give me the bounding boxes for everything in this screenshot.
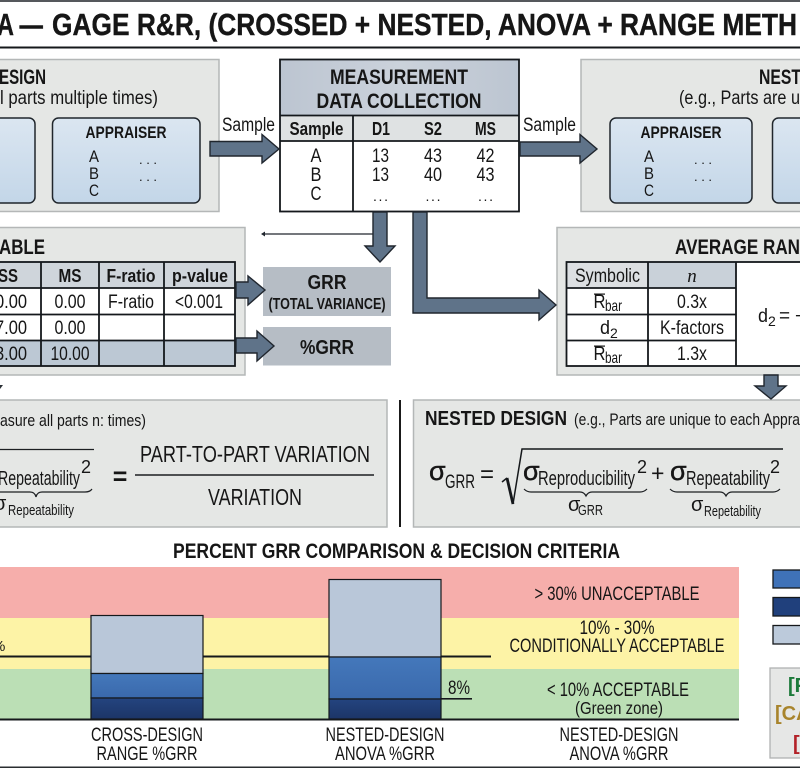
panel: anova table: 10.00	[50, 344, 90, 365]
panel: measurement data collection: A	[310, 146, 322, 167]
panel: measurement data collection: S2	[424, 119, 442, 139]
appraiser box right: ...	[694, 152, 712, 167]
panel: measurement data collection: ...	[478, 188, 493, 204]
panel: nested design formula: GRR	[578, 502, 603, 519]
appraiser box left	[52, 118, 200, 203]
panel: average range table: bar	[605, 350, 622, 367]
axis labels: CROSS-DESIGN	[91, 724, 203, 746]
panel: measurement data collection: D1	[372, 119, 390, 139]
zone labels: CONDITIONALLY ACCEPTABLE	[510, 636, 724, 657]
panel: crossed design formula	[0, 400, 387, 527]
box: percent GRR: %GRR	[300, 336, 354, 359]
panel: nested design formula: NESTED DESIGN	[425, 407, 567, 430]
value label: 8 percent	[441, 678, 472, 700]
appraiser box left: APPRAISER	[86, 123, 166, 142]
panel: nested design formula: +	[651, 460, 664, 486]
panel: measurement data collection: 43	[424, 146, 442, 167]
appraiser box left: C	[89, 181, 99, 200]
bottom rule	[0, 766, 800, 768]
panel: measurement data collection: 13	[372, 165, 389, 186]
panel: anova table	[0, 228, 245, 375]
divider between formula panels	[399, 400, 401, 527]
axis labels: ANOVA %GRR	[335, 743, 435, 765]
arrow: data collection to GRR	[365, 212, 395, 262]
panel: crossed design formula: =	[113, 463, 127, 491]
panel: crossed design formula: VARIATION	[208, 484, 302, 510]
panel: crossed design	[0, 60, 219, 212]
zone labels: > 30% UNACCEPTABLE	[534, 584, 700, 605]
panel: average range table	[557, 228, 800, 375]
panel: measurement data collection: 13	[372, 146, 389, 167]
panel: measurement data collection: Sample	[290, 119, 344, 139]
axis labels: NESTED-DESIGN	[560, 724, 678, 746]
bar: nested-design anova	[329, 580, 441, 719]
heading: percent GRR comparison: PERCENT GRR COMPARISON & DECISION CRITERIA	[173, 540, 620, 563]
panel: average range table: 0.3x	[677, 292, 707, 313]
panel: measurement data collection: MEASUREMENT	[330, 65, 468, 89]
panel: nested design formula: σ	[670, 456, 687, 486]
panel: anova table: 0.00	[54, 318, 86, 339]
panel: crossed design formula: 2	[81, 457, 91, 477]
panel: crossed design: ESIGN	[0, 66, 46, 89]
panel: nested design	[581, 60, 800, 212]
arrow: data collection to average range	[413, 212, 556, 320]
panel: average range table: R	[594, 344, 606, 365]
bar: cross-design range	[91, 616, 203, 719]
panel: anova table: ABLE	[0, 236, 45, 259]
panel: average range table: Symbolic	[575, 266, 640, 287]
arrow: thin return line	[261, 232, 373, 236]
zone bands	[0, 567, 739, 719]
panel: anova table: MS	[58, 265, 82, 286]
appraiser box left: ...	[139, 169, 157, 184]
axis labels: ANOVA %GRR	[570, 743, 668, 765]
box: percent GRR	[263, 327, 391, 366]
arrow: crossed design to data collection: Sample	[222, 115, 275, 136]
arrow tip: anova to crossed formula	[0, 385, 3, 389]
appraiser box right: APPRAISER	[640, 123, 722, 142]
panel: average range table: R	[594, 292, 606, 313]
panel: average range table: 2	[610, 325, 618, 341]
arrow: average range to nested formula	[755, 375, 786, 399]
panel: crossed design formula: Repeatability	[8, 503, 75, 519]
panel: nested design formula: Repetability	[704, 503, 761, 520]
appraiser box right: B	[644, 164, 654, 183]
panel: anova table: <0.001	[175, 292, 223, 313]
panel: anova table: p-value	[172, 265, 228, 286]
panel: nested design formula: GRR	[445, 471, 475, 493]
panel: nested design formula: 2	[770, 457, 780, 477]
panel: measurement data collection: DATA COLLECTION	[316, 89, 482, 113]
arrow: crossed design to data collection	[210, 115, 279, 163]
appraiser box right	[610, 118, 752, 203]
axis labels: RANGE %GRR	[96, 743, 198, 765]
panel: average range table: 1.3x	[677, 344, 707, 365]
panel: average range table: d	[600, 318, 610, 339]
panel: measurement data collection: MS	[475, 119, 496, 139]
panel: measurement data collection: C	[310, 184, 322, 205]
panel: nested design formula: σ	[691, 494, 704, 516]
arrow: anova table to GRR	[236, 276, 265, 305]
legend swatches	[773, 570, 800, 644]
arrow: data collection to nested design	[520, 115, 597, 163]
panel: average range table: 2	[768, 313, 776, 329]
panel: measurement data collection: 43	[476, 165, 494, 186]
panel: nested design formula: Reproducibility	[538, 468, 635, 490]
appraiser box left: ...	[139, 152, 157, 167]
panel: nested design formula: 2	[637, 457, 647, 477]
chart: percent GRR stacked bars with zones	[0, 567, 739, 765]
title banner	[0, 0, 800, 48]
appraiser box left: A	[89, 147, 100, 166]
panel: nested design formula: σ	[523, 456, 540, 486]
zone labels: 10% - 30%	[580, 618, 655, 639]
appraiser box right: A	[644, 147, 655, 166]
arrow: data collection to nested design: Sample	[523, 115, 576, 136]
panel: measurement data collection: ...	[373, 188, 388, 204]
panel: measurement data collection: 42	[476, 146, 494, 167]
appraiser box right: C	[644, 181, 654, 200]
panel: measurement data collection: 40	[424, 165, 442, 186]
decision legend box	[770, 668, 800, 758]
panel: anova table: F-ratio	[108, 292, 154, 313]
box: GRR total variance	[263, 267, 391, 316]
panel: average range table: =	[779, 306, 790, 327]
panel: anova table: 0.00	[54, 292, 86, 313]
panel: crossed design: l parts multiple times)	[0, 88, 158, 109]
appraiser box left: B	[89, 164, 99, 183]
panel: crossed design formula: Repeatability	[0, 468, 80, 490]
panel: nested design formula: =	[480, 461, 494, 488]
panel: anova table: F-ratio	[106, 265, 156, 286]
panel: crossed design formula: asure all parts n: times)	[0, 411, 146, 430]
panel: measurement data collection: ...	[426, 188, 440, 204]
zone labels	[510, 584, 724, 718]
box: GRR total variance: GRR	[308, 271, 347, 294]
panel: measurement data collection: B	[310, 165, 322, 186]
zone labels: (Green zone)	[575, 698, 663, 718]
appraiser box right: ...	[694, 169, 712, 184]
panel: nested design formula: Repeatability	[686, 468, 770, 490]
panel: crossed design formula: PART-TO-PART VARIATION	[140, 441, 370, 467]
panel: nested design formula	[414, 400, 800, 527]
panel: average range table: d	[758, 306, 768, 327]
panel: average range table: n	[687, 266, 697, 287]
panel: average range table: K-factors	[660, 318, 724, 339]
box: GRR total variance: (TOTAL VARIANCE)	[268, 296, 386, 313]
axis labels: NESTED-DESIGN	[326, 724, 444, 746]
axis labels	[91, 724, 678, 765]
panel: nested design formula: σ	[429, 456, 446, 486]
panel: measurement data collection	[280, 60, 519, 212]
panel: average range table: bar	[605, 298, 622, 315]
zone labels: < 10% ACCEPTABLE	[547, 680, 689, 701]
panel: nested design formula: σ	[568, 494, 581, 516]
arrow: anova table to percent GRR	[236, 331, 274, 361]
value label: 8 percent: 8%	[448, 678, 470, 699]
